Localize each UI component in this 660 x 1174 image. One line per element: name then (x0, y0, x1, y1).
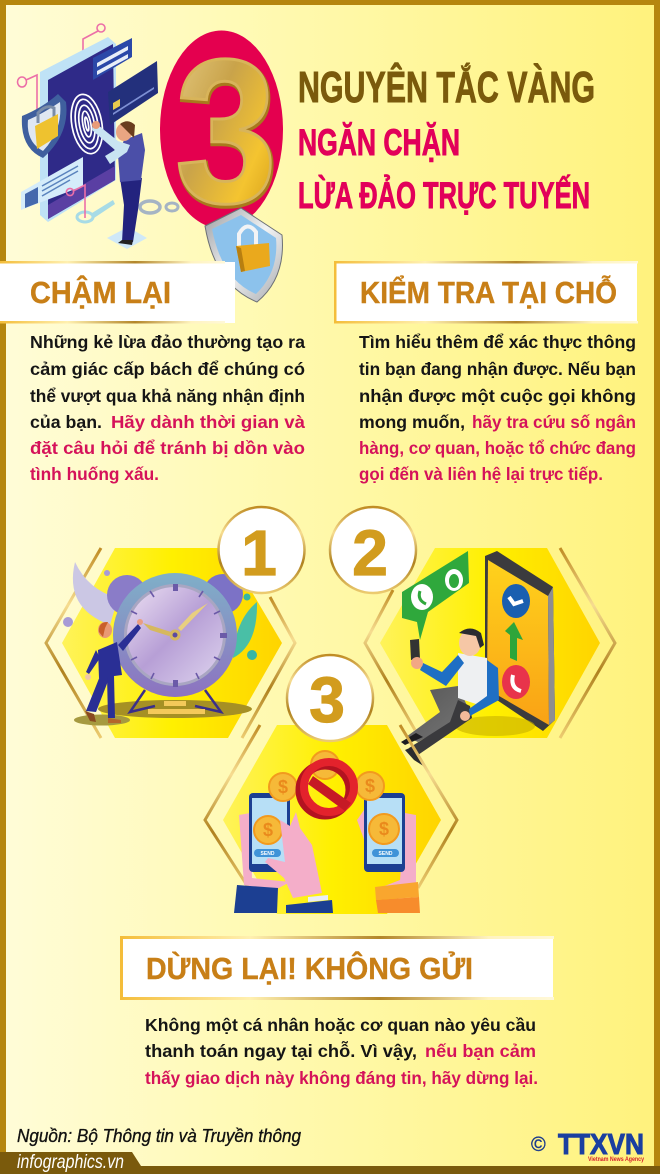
text block: Kiểm tra tại chỗ: mong muốn, (359, 412, 465, 432)
coin links (272, 795, 380, 820)
clock shadow and stand (98, 700, 252, 718)
text block: Dừng lại (145, 1015, 538, 1088)
panel heading: Dừng lại: DỪNG LẠI! KHÔNG GỬI (146, 950, 473, 986)
panel heading: Chậm lại (0, 261, 235, 324)
agency logo: TTXVN (558, 1129, 644, 1161)
text block: Dừng lại: Không một cá nhân hoặc cơ quan nào yêu cầu (145, 1015, 536, 1035)
clock hands (178, 603, 208, 631)
text block: Kiểm tra tại chỗ (359, 332, 636, 484)
connector lines (18, 24, 105, 110)
text block: Kiểm tra tại chỗ: tin bạn đang nhận được. Nếu bạn (359, 359, 636, 379)
text block: Kiểm tra tại chỗ: gọi đến và liên hệ lại trực tiếp. (359, 464, 603, 484)
key (77, 212, 93, 222)
hexagon 3: blocked money transfer illustration: $ (263, 820, 273, 840)
footer bar with site name (0, 1152, 660, 1174)
number badge 3: 3 (309, 664, 345, 736)
text block: Dừng lại: thanh toán ngay tại chỗ. Vì vậy, (145, 1040, 417, 1061)
prohibition sign (300, 765, 350, 815)
clock body (113, 573, 237, 697)
fingerprint (67, 92, 107, 156)
password card (93, 38, 132, 80)
hexagon 2: phone call illustration (365, 548, 615, 767)
agency logo: © (531, 1134, 546, 1156)
agency logo (531, 1129, 644, 1163)
text block: Chậm lại: đặt câu hỏi để tránh bị dồn vào (30, 438, 305, 458)
big number 3 on pink ellipse: 3 (175, 17, 277, 246)
text block: Chậm lại: tình huống xấu. (30, 464, 159, 484)
panel heading: Dừng lại (120, 936, 554, 1000)
id card (21, 157, 83, 210)
number badge 3 (287, 655, 373, 741)
text block: Chậm lại: cảm giác cấp bách để chúng có (30, 359, 305, 379)
gears (140, 201, 160, 213)
title (298, 62, 595, 216)
footer bar with site name: infographics.vn (17, 1152, 124, 1173)
person (120, 178, 142, 242)
hexagon 1: clock illustration (46, 548, 295, 738)
panel heading: Kiểm tra tại chỗ (334, 261, 638, 324)
small shield with padlock (22, 94, 67, 158)
text block: Kiểm tra tại chỗ: nhận được một cuộc gọi không (359, 386, 636, 406)
leaves (73, 562, 118, 625)
text block: Chậm lại: Hãy dành thời gian và (111, 412, 305, 432)
illustration: fingerprint security (18, 24, 178, 249)
phone panel (40, 37, 116, 222)
right phone with hand (382, 813, 416, 887)
title: NGĂN CHẶN (298, 122, 460, 163)
hexagon 3: blocked money transfer illustration (205, 725, 457, 914)
panel heading: Chậm lại: CHẬM LẠI (30, 274, 171, 310)
credit card (108, 61, 158, 125)
pointing hand (265, 812, 322, 898)
number badge 1: 1 (241, 517, 277, 589)
panel heading: Kiểm tra tại chỗ: KIỂM TRA TẠI CHỖ (360, 274, 617, 310)
speech bubble (402, 551, 469, 640)
text block: Kiểm tra tại chỗ: hàng, cơ quan, hoặc tổ chức đang (359, 438, 636, 458)
big number 3 on pink ellipse: 3 (176, 19, 278, 248)
number badge 2 (330, 507, 416, 593)
hexagon 3: blocked money transfer illustration: SEND (261, 851, 275, 857)
text block: Kiểm tra tại chỗ: Tìm hiểu thêm để xác thực thông (359, 332, 636, 352)
smartphone (485, 551, 555, 731)
person at clock (74, 714, 130, 726)
number badge 2: 2 (352, 517, 388, 589)
number badge 1 (218, 507, 304, 593)
platform under person (107, 227, 147, 249)
text block: Chậm lại: thể vượt qua khả năng nhận định (30, 386, 305, 406)
icon: shield with padlock (205, 208, 282, 302)
text block: Chậm lại: Những kẻ lừa đảo thường tạo ra (30, 332, 305, 352)
coins (254, 751, 399, 844)
source note: Nguồn: Bộ Thông tin và Truyền thông (17, 1126, 301, 1146)
hexagon 3: blocked money transfer illustration: $ (278, 777, 288, 797)
hexagon 3: blocked money transfer illustration: $ (379, 819, 389, 839)
text block: Dừng lại: nếu bạn cảm (425, 1041, 536, 1061)
left phone with hand (239, 813, 290, 890)
text block: Chậm lại (30, 332, 305, 484)
text block: Kiểm tra tại chỗ: hãy tra cứu số ngân (472, 412, 636, 432)
agency logo: Vietnam News Agency (588, 1156, 644, 1163)
hexagon 3: blocked money transfer illustration: $ (365, 776, 375, 796)
text block: Dừng lại: thấy giao dịch này không đáng tin, hãy dừng lại. (145, 1068, 538, 1088)
sleeves (234, 885, 278, 913)
upload arrow (505, 622, 523, 661)
text block: Chậm lại: của bạn. (30, 412, 102, 432)
clock bells (107, 575, 147, 615)
hexagon 3: blocked money transfer illustration: SEND (379, 851, 393, 857)
person sitting with phone (455, 716, 535, 736)
